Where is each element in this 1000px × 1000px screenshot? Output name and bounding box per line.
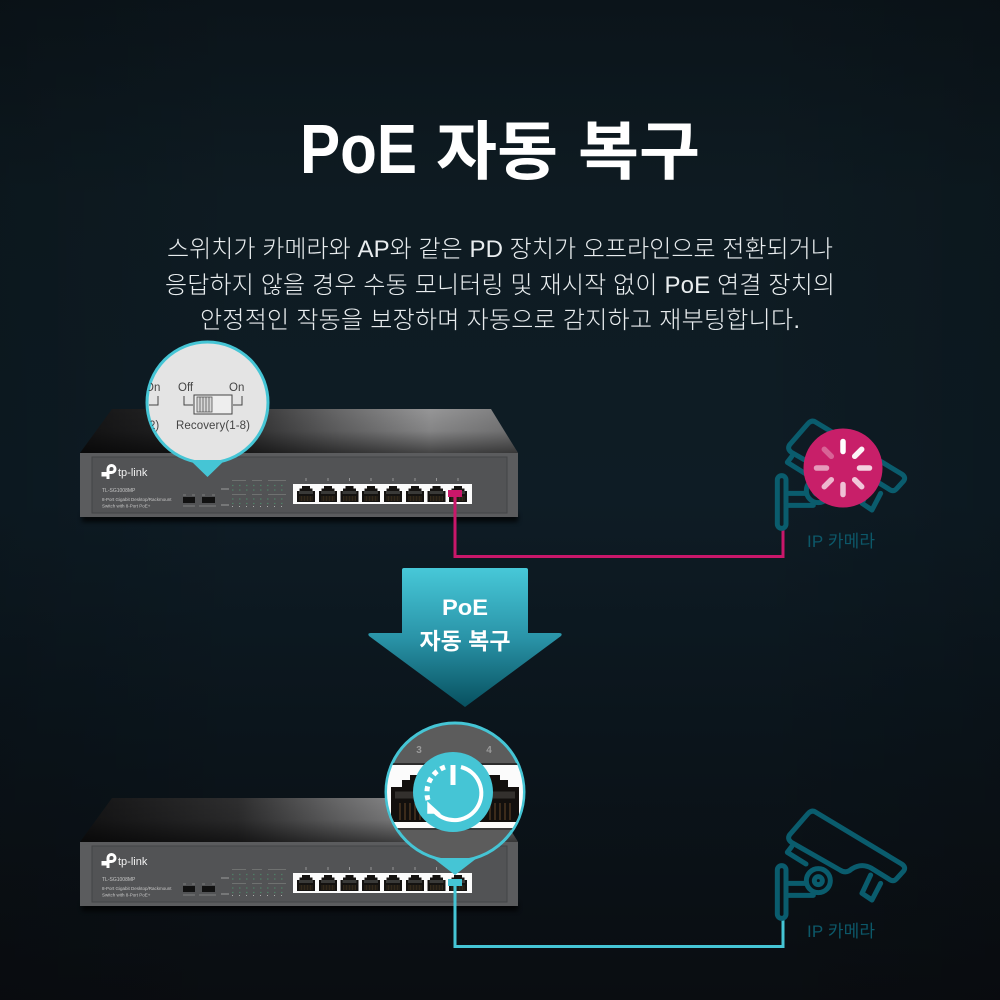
model text: TL-SG1008MP <box>102 877 136 883</box>
label: IP camera bottom: IP 카메라 <box>807 922 875 941</box>
model text: TL-SG1008MP <box>102 488 136 494</box>
bottom switch <box>80 798 518 911</box>
model text: Switch with 8-Port PoE+ <box>102 892 151 898</box>
description text: 스위치가 카메라와 AP와 같은 PD 장치가 오프라인으로 전환되거나 <box>167 236 833 263</box>
title: 복구 <box>578 116 700 188</box>
tp-link logo <box>102 854 148 868</box>
magnifier: recovery DIP switch: Off <box>178 382 194 394</box>
model text: 8-Port Gigabit Desktop/Rackmount <box>102 497 172 502</box>
icon: IP camera (online) <box>777 811 905 918</box>
mode switches <box>183 884 216 895</box>
icon: IP camera (offline) <box>777 421 905 528</box>
status LEDs <box>221 870 288 896</box>
description text: 응답하지 않을 경우 수동 모니터링 및 재시작 없이 PoE 연결 장치의 <box>165 272 835 299</box>
model text <box>102 877 172 898</box>
top switch <box>80 409 518 522</box>
magnifier: port with recovery icon: 4 <box>486 745 492 756</box>
title: PoE <box>300 110 417 188</box>
mode switches <box>183 495 216 506</box>
teal PoE cable to camera <box>448 879 783 946</box>
model text: Switch with 8-Port PoE+ <box>102 504 151 508</box>
label: IP camera top: IP 카메라 <box>807 532 875 551</box>
magnifier: recovery DIP switch: On <box>229 382 244 394</box>
arrow: PoE auto recovery: 자동 복구 <box>420 628 510 654</box>
model text: 8-Port Gigabit Desktop/Rackmount <box>102 886 172 891</box>
arrow: PoE auto recovery: PoE <box>442 595 488 620</box>
icon: pink loading spinner <box>804 428 882 508</box>
magnifier: recovery DIP switch <box>145 342 268 477</box>
magnifier: recovery DIP switch: 2) <box>149 420 159 432</box>
magenta PoE cable to camera <box>448 490 783 556</box>
status LEDs <box>221 480 288 506</box>
model text <box>102 488 172 508</box>
tp-link logo <box>102 466 148 479</box>
ethernet ports <box>293 867 472 893</box>
title: 자동 <box>436 116 558 188</box>
tp-link logo: tp-link <box>118 856 148 868</box>
tp-link logo: tp-link <box>118 467 148 479</box>
description text: 안정적인 작동을 보장하며 자동으로 감지하고 재부팅합니다. <box>200 307 800 334</box>
icon: power recovery <box>413 752 493 832</box>
magnifier: port with recovery icon: 3 <box>416 745 422 756</box>
magnifier: recovery DIP switch: Recovery(1-8) <box>176 420 250 432</box>
arrow: PoE auto recovery <box>368 568 562 707</box>
title <box>300 110 700 188</box>
magnifier: recovery DIP switch: On <box>145 382 160 394</box>
magnifier: port with recovery icon <box>385 723 525 875</box>
description text <box>165 236 835 334</box>
ethernet ports <box>293 478 472 504</box>
